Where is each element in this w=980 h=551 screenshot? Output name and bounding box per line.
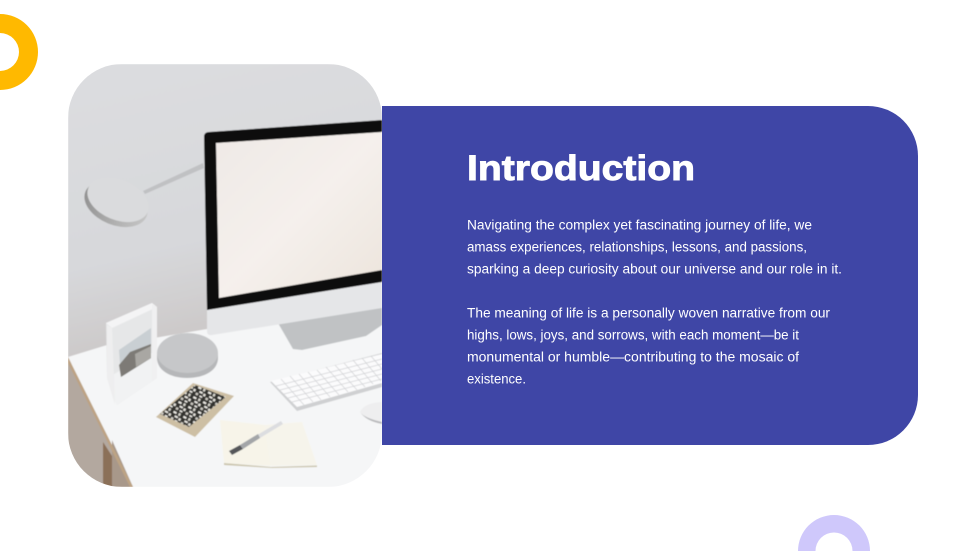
monitor stand [278,305,382,350]
decorative ring: lavender [798,515,870,551]
speckled notebook [156,383,234,437]
lamp arm [143,163,204,194]
desk leg [68,364,112,484]
desk edge [68,357,133,487]
paragraph one: amass experiences, relationships, lessons, and passions, [467,240,807,256]
monitor body [204,120,382,335]
photo: desk with monitor [68,64,382,487]
paragraph one [467,218,842,278]
paragraph two: The meaning of life is a personally woven narrative from our [467,306,830,322]
framed photo [119,328,152,364]
paragraph two: monumental or humble—contributing to the mosaic of [467,350,799,366]
heading: Introduction [467,149,695,188]
wall background [68,64,382,364]
desk surface [68,324,382,486]
panel text block [467,149,842,388]
paragraph one: sparking a deep curiosity about our universe and our role in it. [467,262,842,278]
mouse [360,402,382,422]
keyboard [270,353,382,411]
lamp head [84,186,147,228]
lamp base [157,333,218,378]
paragraph two [467,306,830,388]
paragraph one: Navigating the complex yet fascinating journey of life, we [467,218,812,234]
decorative ring: yellow [0,14,38,90]
open notebook with pen [220,420,317,468]
acrylic photo block [106,302,158,378]
panel: introduction background [382,106,918,445]
paragraph two: existence. [467,372,526,388]
paragraph two: highs, lows, joys, and sorrows, with each moment—be it [467,328,799,344]
